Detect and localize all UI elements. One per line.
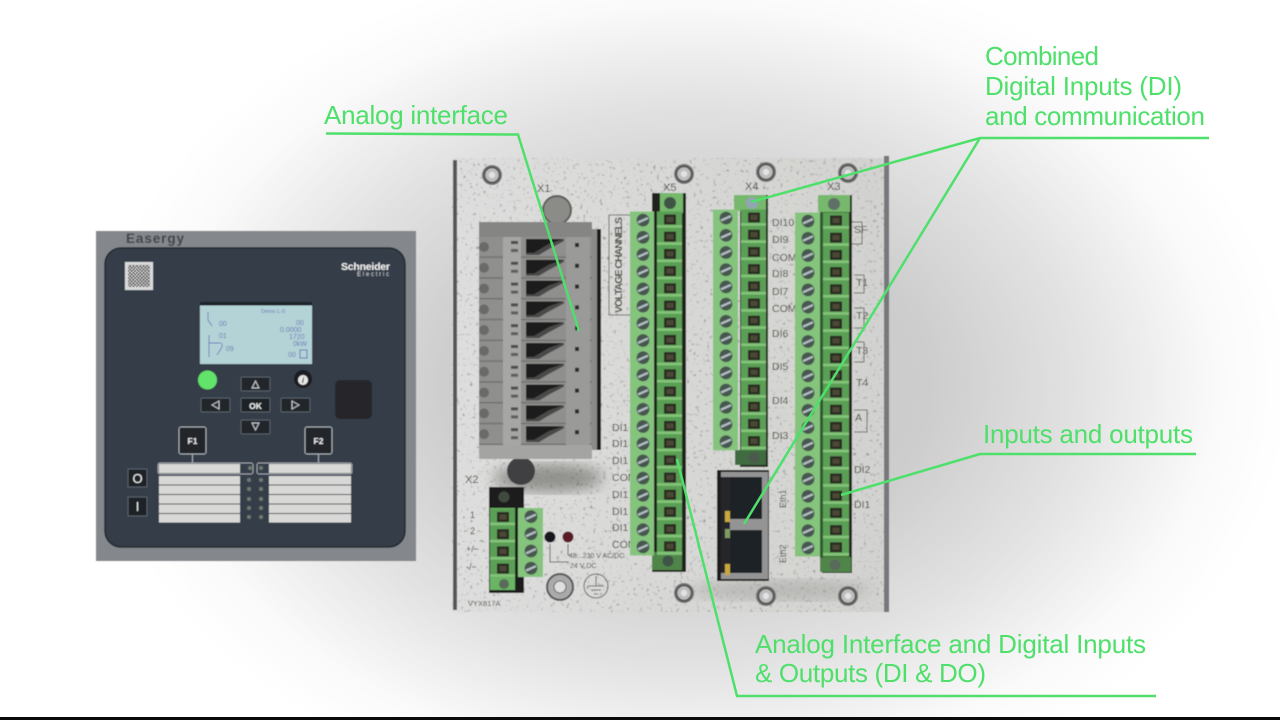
plate labels: X1 [537, 183, 550, 195]
callout: Combined Digital Inputs and communication: and communication [985, 101, 1205, 131]
plate labels: DI10 [772, 217, 794, 229]
plate labels: DI2 [854, 464, 870, 476]
info button [294, 370, 312, 388]
plate labels: DI3 [772, 430, 788, 442]
I button: I [136, 499, 139, 514]
plate labels: X2 [465, 474, 478, 486]
callout: Inputs and outputs [841, 419, 1196, 495]
plate labels: +/~ [466, 544, 479, 554]
connector X2: power supply [489, 487, 608, 600]
label strips and indicator LEDs [158, 463, 352, 522]
connector X1: analog interface [479, 222, 601, 459]
plate labels: -/~ [466, 562, 477, 572]
function key F1 [179, 427, 206, 463]
LCD display: 0kW [293, 341, 307, 348]
Ethernet ports [717, 470, 769, 581]
plate labels: DI1 [612, 489, 628, 501]
panel: rear connector photo [452, 156, 889, 612]
info button: i [302, 376, 305, 385]
plate labels: DI8 [772, 268, 788, 280]
plate labels: COM [612, 472, 636, 484]
LCD display: 00 [219, 321, 227, 328]
logo: Schneider Electric: Electric [357, 272, 389, 278]
connector X5: analog and DI/DO terminals [630, 193, 686, 572]
plate labels: Eth2 [778, 544, 788, 563]
LCD display: Demo L-0 [261, 309, 285, 315]
plate labels: COM [612, 539, 636, 551]
function key F2: F2 [314, 436, 324, 446]
O button [128, 469, 147, 487]
plate labels: X5 [663, 182, 676, 194]
connector X4: digital inputs [713, 195, 768, 467]
plate labels: DI1 [612, 506, 628, 518]
function key F1: F1 [188, 436, 198, 446]
O button: O [132, 471, 143, 486]
LCD display: 00 [288, 352, 296, 359]
LCD display: 01 [219, 333, 227, 340]
plate labels: DI1 [612, 438, 628, 450]
plate labels: DI1 [612, 422, 628, 434]
plate labels: DI1 [612, 522, 628, 534]
connector X3: inputs and outputs [795, 195, 852, 573]
plate labels: T4 [856, 377, 868, 389]
panel: front panel photo [96, 231, 416, 561]
LCD display: 00 [296, 320, 304, 327]
callout: Analog interface [324, 100, 579, 331]
plate labels: 24 V DC [570, 563, 596, 570]
communication port cover [335, 380, 372, 419]
LCD display [200, 302, 312, 364]
I button [128, 497, 147, 516]
plate labels: DI6 [772, 328, 788, 340]
plate labels: DI1 [854, 499, 870, 511]
callout: Analog Interface and Digital Inputs and Outputs: & Outputs (DI & DO) [755, 658, 986, 688]
LCD display: 09 [226, 346, 234, 353]
LCD display: 1720 [289, 334, 305, 341]
bottom edge bar [0, 717, 1280, 720]
front panel frame [96, 231, 416, 561]
plate labels: SF [854, 224, 867, 236]
plate labels: T1 [856, 277, 868, 289]
plate labels: T3 [856, 345, 868, 357]
function key F2 [305, 427, 332, 463]
callout: Analog Interface and Digital Inputs and Outputs: Analog Interface and Digital Inputs [755, 629, 1146, 659]
plate labels: DI5 [772, 361, 788, 373]
plate labels: 1 [470, 510, 475, 520]
plate labels: VYX817A [468, 599, 501, 608]
plate labels: DI7 [772, 286, 788, 298]
status LED [198, 370, 217, 390]
metal back plate [452, 156, 889, 612]
QR code [125, 262, 153, 290]
plate labels: Eth1 [778, 489, 788, 508]
plate labels: DI1 [612, 455, 628, 467]
plate labels [465, 181, 870, 608]
plate labels: X3 [827, 181, 840, 193]
front panel face [105, 248, 405, 547]
plate labels: DI9 [772, 234, 788, 246]
logo: Schneider Electric: Schneider [341, 261, 390, 273]
plate labels: 2 [470, 526, 475, 536]
plate labels: DI4 [772, 395, 788, 407]
callout: Combined Digital Inputs and communication: Digital Inputs (DI) [985, 71, 1182, 101]
plate labels: COM [772, 303, 796, 315]
callout: Inputs and outputs: Inputs and outputs [983, 419, 1193, 449]
navigation buttons: OK [249, 401, 263, 411]
navigation buttons [201, 377, 310, 434]
plate labels: 48...230 V AC/DC [569, 553, 624, 560]
mounting bolts [482, 162, 858, 606]
callout: Analog interface: Analog interface [324, 100, 508, 130]
device name: Easergy: Easergy [126, 231, 184, 246]
plate labels: VOLTAGE CHANNELS [613, 217, 625, 313]
LCD display: 0.0000 [280, 327, 302, 334]
plate labels: X4 [745, 181, 758, 193]
callout: Combined Digital Inputs and communication [744, 41, 1209, 524]
plate labels: T2 [856, 310, 868, 322]
plate labels: COM [772, 252, 796, 264]
callout: Combined Digital Inputs and communication: Combined [985, 41, 1099, 71]
callout: Analog Interface and Digital Inputs and Outputs [677, 459, 1156, 696]
plate labels: A [855, 412, 862, 424]
